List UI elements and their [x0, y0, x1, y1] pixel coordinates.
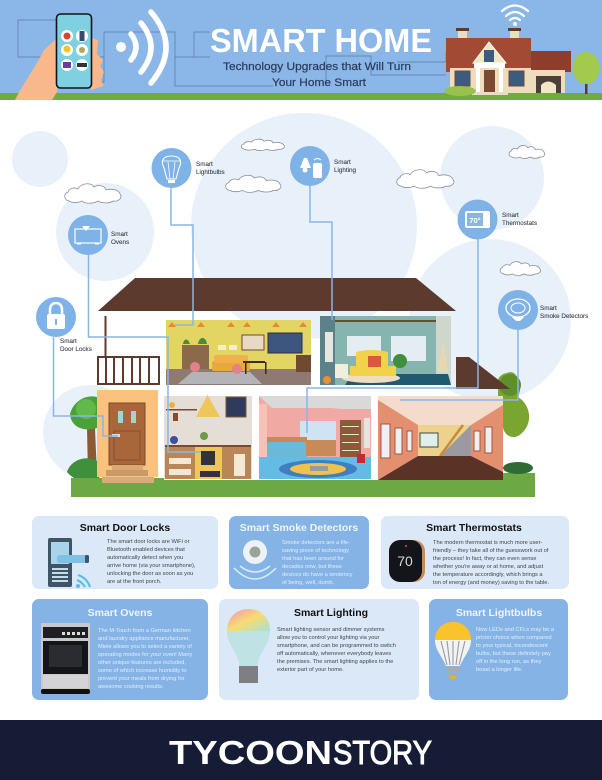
left tree	[70, 396, 97, 476]
body text: are at the front porch.	[107, 579, 162, 585]
callout: smart thermostats: 70°	[469, 216, 481, 225]
heading: Smart Door Locks	[80, 522, 170, 534]
icon: smoke detector	[234, 540, 276, 579]
panel: smart lighting	[219, 599, 419, 700]
body text: whether you're away or at home, and adjust	[432, 564, 544, 570]
callout: smart door locks: Door Locks	[60, 346, 92, 353]
callout: smart ovens: Smart	[111, 231, 128, 238]
body text: of being, well, dumb.	[282, 580, 335, 586]
connector lines	[54, 186, 518, 452]
body text: allow you to control your lighting via your	[277, 635, 380, 641]
body text: bulbs, but these definitely pay	[476, 651, 551, 657]
body text: Bluetooth enabled devices that	[107, 547, 185, 553]
body text: unlocking the door as soon as you	[107, 571, 193, 577]
callout: smart smoke detectors	[498, 290, 588, 330]
body text: to your typical, incandescent	[476, 643, 548, 649]
body text: arrive home (via your smartphone),	[107, 563, 196, 569]
bush	[67, 458, 101, 482]
bedroom	[259, 396, 371, 479]
callout: smart lightbulbs: Smart	[196, 161, 213, 168]
body text: The M-Touch from a German kitchen	[98, 628, 191, 634]
heading: Smart Ovens	[88, 607, 153, 619]
body text: some of which increase humidity to	[98, 668, 187, 674]
icon: thermostat	[389, 540, 425, 582]
callout: smart ovens: Ovens	[111, 239, 129, 246]
subtitle: Technology Upgrades that Will Turn	[223, 61, 411, 73]
heading: Smart Smoke Detectors	[240, 522, 358, 534]
body text: off in the long run, as they	[476, 659, 542, 665]
body text: Miele allows you to select a variety of	[98, 644, 192, 650]
callout: smart lighting: Lighting	[334, 167, 357, 174]
callout: smart thermostats	[458, 200, 537, 240]
body text: boast a longer life.	[476, 667, 523, 673]
icon: smart lock phone	[48, 538, 90, 588]
right tree	[497, 372, 529, 437]
body text: prevent your meals from drying for	[98, 676, 185, 682]
icon: colour bulb	[227, 609, 270, 683]
callout: smart lightbulbs: Lightbulbs	[196, 169, 225, 176]
callout: smart door locks	[36, 297, 92, 353]
title: SMART HOME	[210, 22, 432, 59]
illustration: tree	[572, 52, 600, 94]
body text: awesome cooking results.	[98, 684, 164, 690]
callout: smart ovens	[68, 215, 129, 255]
body text: operating modes for your oven! Many	[98, 652, 192, 658]
body text: ton of energy (and money) saving to the table.	[433, 580, 549, 586]
body text: Now LEDs and CFLs may be a	[476, 627, 555, 633]
callout: smart thermostats: Thermostats	[502, 220, 537, 227]
illustration: house	[444, 28, 571, 96]
icon: wifi signal waves	[116, 12, 166, 83]
panel: smart lightbulbs	[429, 599, 568, 700]
logo wordmark: TYCOON	[169, 734, 332, 771]
header banner	[0, 0, 602, 100]
subtitle: Your Home Smart	[272, 77, 366, 89]
logo wordmark	[169, 734, 432, 771]
body text: smartphone, and can be programmed to switch	[277, 643, 396, 649]
ground	[71, 473, 535, 497]
body text: automatically detect when you	[107, 555, 183, 561]
panel: smart ovens	[32, 599, 208, 700]
body text: the temperature accordingly, which brings a	[433, 572, 543, 578]
body text: Smart lighting sensor and dimmer systems	[277, 627, 385, 633]
kitchen	[164, 394, 252, 479]
background circles	[12, 113, 571, 479]
icon: yellow lightbulb	[435, 622, 471, 679]
callout: smart smoke detectors: Smoke Detectors	[540, 313, 588, 320]
body text: the premises. The smart lighting applies to the	[277, 659, 393, 665]
heading: Smart Lighting	[294, 607, 368, 619]
body text: Smoke detectors are a life-	[282, 540, 350, 546]
roof	[98, 278, 456, 311]
icon: thermostat: 70	[397, 553, 413, 569]
body text: other unique features are included,	[98, 660, 186, 666]
body text: pricier choice when compared	[476, 635, 552, 641]
panel: smart smoke detectors	[229, 516, 369, 589]
heading: Smart Lightbulbs	[456, 607, 542, 619]
icon: hand holding phone	[15, 14, 104, 100]
callout: smart door locks: Smart	[60, 338, 77, 345]
body text: friendly – they take all of the guesswork out of	[433, 548, 549, 554]
body text: exterior part of your home.	[277, 667, 344, 673]
front door	[97, 390, 158, 483]
body text: saving piece of technology	[282, 548, 349, 554]
right bush	[503, 462, 533, 474]
callout: smart lightbulbs	[152, 148, 225, 188]
icon: oven	[41, 623, 90, 694]
heading: Smart Thermostats	[426, 522, 522, 534]
body text: The smart door locks are WiFi or	[107, 539, 190, 545]
body text: that has been around for	[282, 556, 344, 562]
footer	[0, 720, 602, 780]
callout: smart thermostats: Smart	[502, 212, 519, 219]
logo wordmark: STORY	[333, 734, 432, 771]
body text: devices do have a tendency	[282, 572, 353, 578]
upper right room	[320, 316, 451, 385]
lower side roof	[456, 357, 510, 389]
illustration: cutaway house	[67, 278, 535, 497]
icon: wifi above house	[502, 6, 528, 26]
body text: The modern thermostat is much more user-	[433, 540, 542, 546]
body text: decades now, but these	[282, 564, 342, 570]
body text: off automatically, whenever everybody leaves	[277, 651, 391, 657]
header circuit lines	[18, 20, 446, 86]
panel: smart door locks	[32, 516, 218, 589]
clouds	[65, 139, 545, 275]
upper left room	[166, 320, 311, 385]
body text: the process! In fact, they can even sense	[433, 556, 536, 562]
body text: and laundry appliance manufacturer,	[98, 636, 190, 642]
living room	[378, 396, 503, 480]
callout: smart smoke detectors: Smart	[540, 305, 557, 312]
balcony railing	[97, 316, 160, 385]
panel: smart thermostats	[381, 516, 569, 589]
callout: smart lighting	[290, 146, 357, 186]
callout: smart lighting: Smart	[334, 159, 351, 166]
